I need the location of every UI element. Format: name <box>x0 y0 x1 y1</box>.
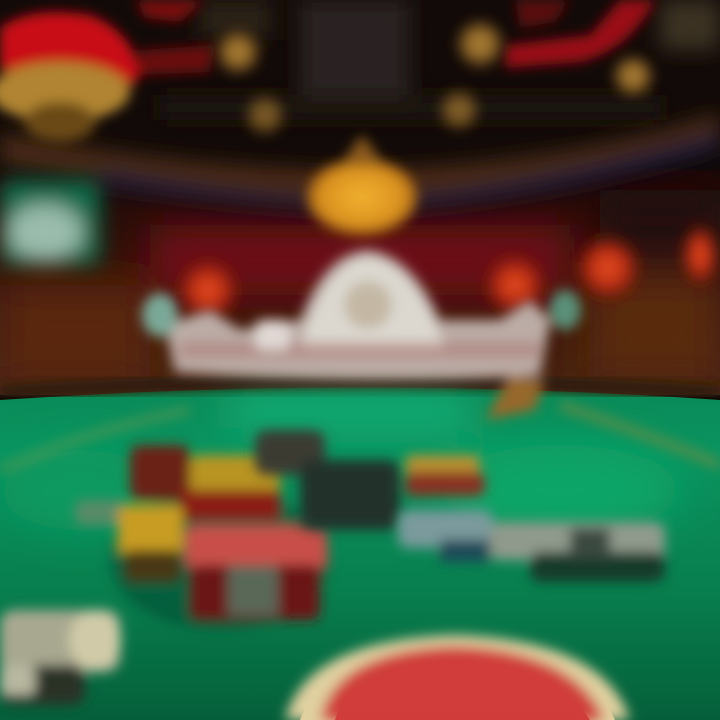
ceiling arch band <box>0 113 720 212</box>
dark table edge <box>0 380 720 393</box>
poker chip stacks: right group <box>398 455 665 582</box>
background: dark ceiling <box>0 0 720 200</box>
table highlights <box>0 395 680 535</box>
icon: central golden chandelier <box>307 135 417 235</box>
table line markings <box>0 405 720 470</box>
ceiling details <box>160 0 720 120</box>
panel: green felt table <box>0 380 720 720</box>
icon: red drapes upper right <box>505 0 655 68</box>
poker chip: large red foreground <box>285 635 630 720</box>
icon: red chandelier left <box>0 0 215 142</box>
icon: green sign left <box>0 180 100 265</box>
red curtains <box>0 190 720 385</box>
central white table display <box>142 250 581 420</box>
poker chip stacks: black group <box>255 430 400 530</box>
icon: wall lamps <box>174 221 720 324</box>
icon: ceiling lamps <box>212 16 657 139</box>
poker chip stacks: left group <box>75 445 330 630</box>
poker chip stack: lower left <box>0 610 121 705</box>
panel: back wall <box>0 170 720 395</box>
